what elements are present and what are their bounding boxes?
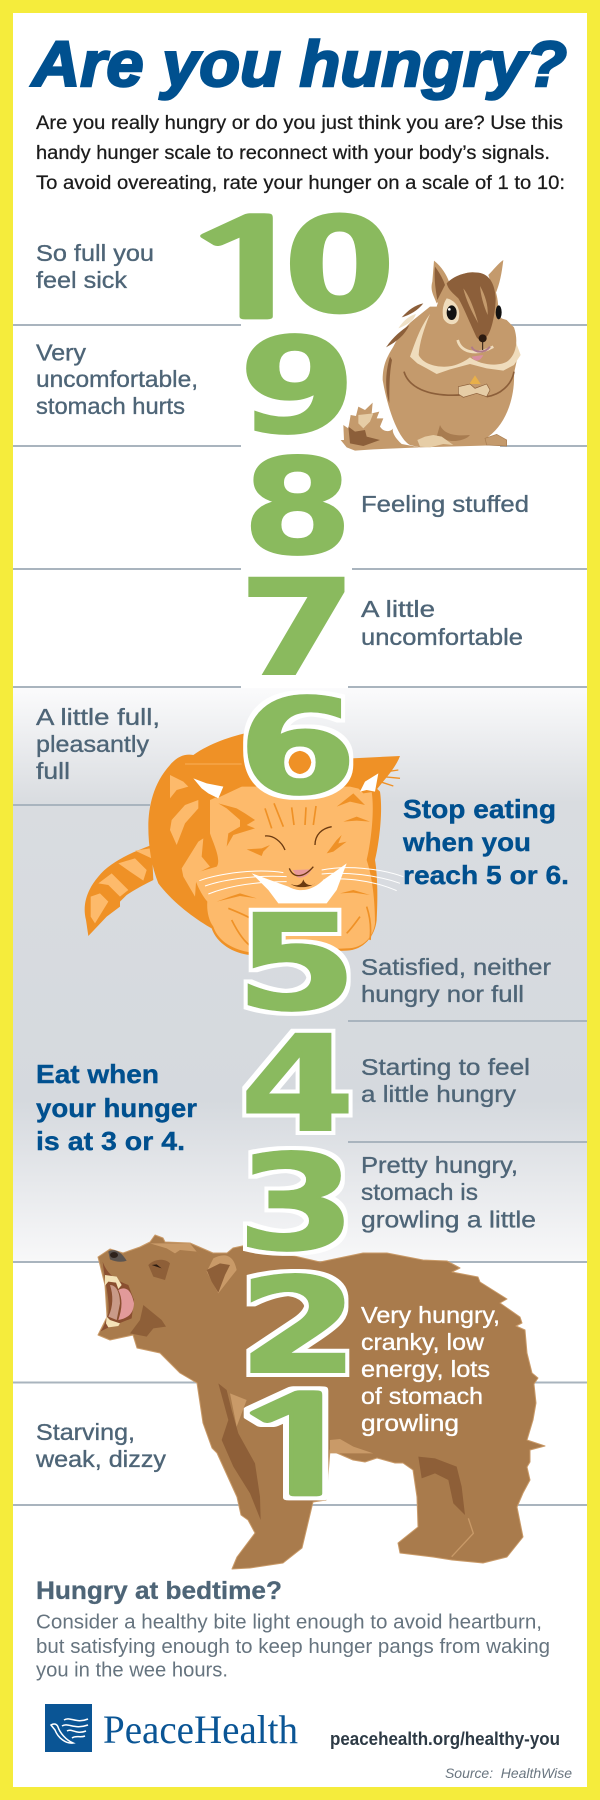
heading: hungry at bedtime: Hungry at bedtime? xyxy=(36,1577,282,1605)
label: level 9 xyxy=(36,340,198,419)
label: level 9: stomach hurts xyxy=(36,393,185,419)
label: level 5 xyxy=(361,954,551,1007)
numeral 7: 7 xyxy=(238,552,357,705)
numeral 5: 5 xyxy=(235,887,358,1040)
bear hind leg details xyxy=(330,1439,473,1557)
label: level 7: A little xyxy=(361,596,435,622)
label: level 3 xyxy=(361,1152,536,1232)
label: level 4: a little hungry xyxy=(361,1081,517,1107)
label: level 2: energy, lots xyxy=(361,1356,490,1382)
bear head and chest details xyxy=(100,1243,261,1520)
callout: stop eating xyxy=(402,794,569,890)
label: level 1: weak, dizzy xyxy=(35,1446,167,1472)
logo: PeaceHealth: PeaceHealth xyxy=(103,1707,298,1752)
numeral 1: 1 xyxy=(216,1381,383,1516)
illustration: roaring bear xyxy=(98,1235,545,1569)
callout: stop eating: reach 5 or 6. xyxy=(403,860,569,890)
callout: eat when: is at 3 or 4. xyxy=(36,1126,185,1156)
label: level 10: So full you xyxy=(36,240,154,266)
label: level 5: Satisfied, neither xyxy=(361,954,551,980)
numeral 10: 0 xyxy=(283,189,396,343)
bedtime paragraph xyxy=(36,1612,550,1682)
label: level 5: hungry nor full xyxy=(361,981,524,1007)
icon: dove square xyxy=(45,1704,92,1752)
label: level 10: feel sick xyxy=(36,267,128,293)
label: level 4 xyxy=(361,1054,530,1107)
callout: stop eating: Stop eating xyxy=(403,794,556,824)
label: level 2: of stomach xyxy=(361,1383,483,1409)
callout: eat when: your hunger xyxy=(36,1093,197,1123)
label: level 7 xyxy=(361,596,523,650)
intro paragraph: Are you really hungry or do you just think you are? Use this xyxy=(36,113,563,134)
title: Are you hungry? xyxy=(30,28,567,100)
label: level 9: uncomfortable, xyxy=(36,366,198,392)
label: level 9: Very xyxy=(36,340,87,366)
website url: peacehealth.org/healthy-you xyxy=(330,1729,560,1749)
scale divider lines xyxy=(13,325,587,1505)
bedtime paragraph: you in the wee hours. xyxy=(36,1660,228,1682)
numeral 4: 4 xyxy=(240,1008,355,1162)
label: level 8: Feeling stuffed xyxy=(361,491,529,517)
callout: eat when xyxy=(36,1059,197,1156)
label: level 1: Starving, xyxy=(36,1419,135,1445)
label: level 3: stomach is xyxy=(361,1179,478,1205)
label: level 3: growling a little xyxy=(361,1206,536,1232)
intro paragraph: handy hunger scale to reconnect with your body’s signals. xyxy=(36,143,550,164)
label: level 3: Pretty hungry, xyxy=(361,1152,518,1178)
label: level 10 xyxy=(36,240,154,293)
intro paragraph: To avoid overeating, rate your hunger on a scale of 1 to 10: xyxy=(36,173,565,194)
callout: stop eating: when you xyxy=(402,827,531,857)
numeral 6: 6 xyxy=(238,671,357,825)
label: level 6: A little full, xyxy=(36,704,160,730)
numeral 9: 9 xyxy=(239,309,356,463)
intro paragraph xyxy=(36,113,565,194)
label: level 2: Very hungry, xyxy=(361,1302,500,1328)
label: level 1 xyxy=(35,1419,167,1472)
label: level 2: cranky, low xyxy=(361,1329,484,1355)
illustration: sleeping cat xyxy=(85,732,403,955)
label: level 2 xyxy=(361,1302,500,1436)
numeral 10 xyxy=(167,189,396,343)
source credit: Source: HealthWise xyxy=(445,1765,572,1781)
label: level 7: uncomfortable xyxy=(361,624,523,650)
numeral 3: 3 xyxy=(237,1127,356,1281)
numeral 10: 1 xyxy=(167,204,333,339)
illustration: chipmunk xyxy=(341,260,521,451)
label: level 4: Starting to feel xyxy=(361,1054,530,1080)
callout: eat when: Eat when xyxy=(36,1059,159,1089)
label: level 6: full xyxy=(36,758,70,784)
label: level 2: growling xyxy=(361,1410,459,1436)
bedtime paragraph: but satisfying enough to keep hunger pangs from waking xyxy=(36,1636,550,1658)
numeral 8: 8 xyxy=(242,432,353,585)
grey gradient band behind the scale xyxy=(13,688,587,1262)
bedtime paragraph: Consider a healthy bite light enough to avoid heartburn, xyxy=(36,1612,542,1634)
label: level 6 xyxy=(36,704,160,784)
label: level 6: pleasantly xyxy=(36,731,150,757)
numeral 2: 2 xyxy=(238,1251,359,1404)
